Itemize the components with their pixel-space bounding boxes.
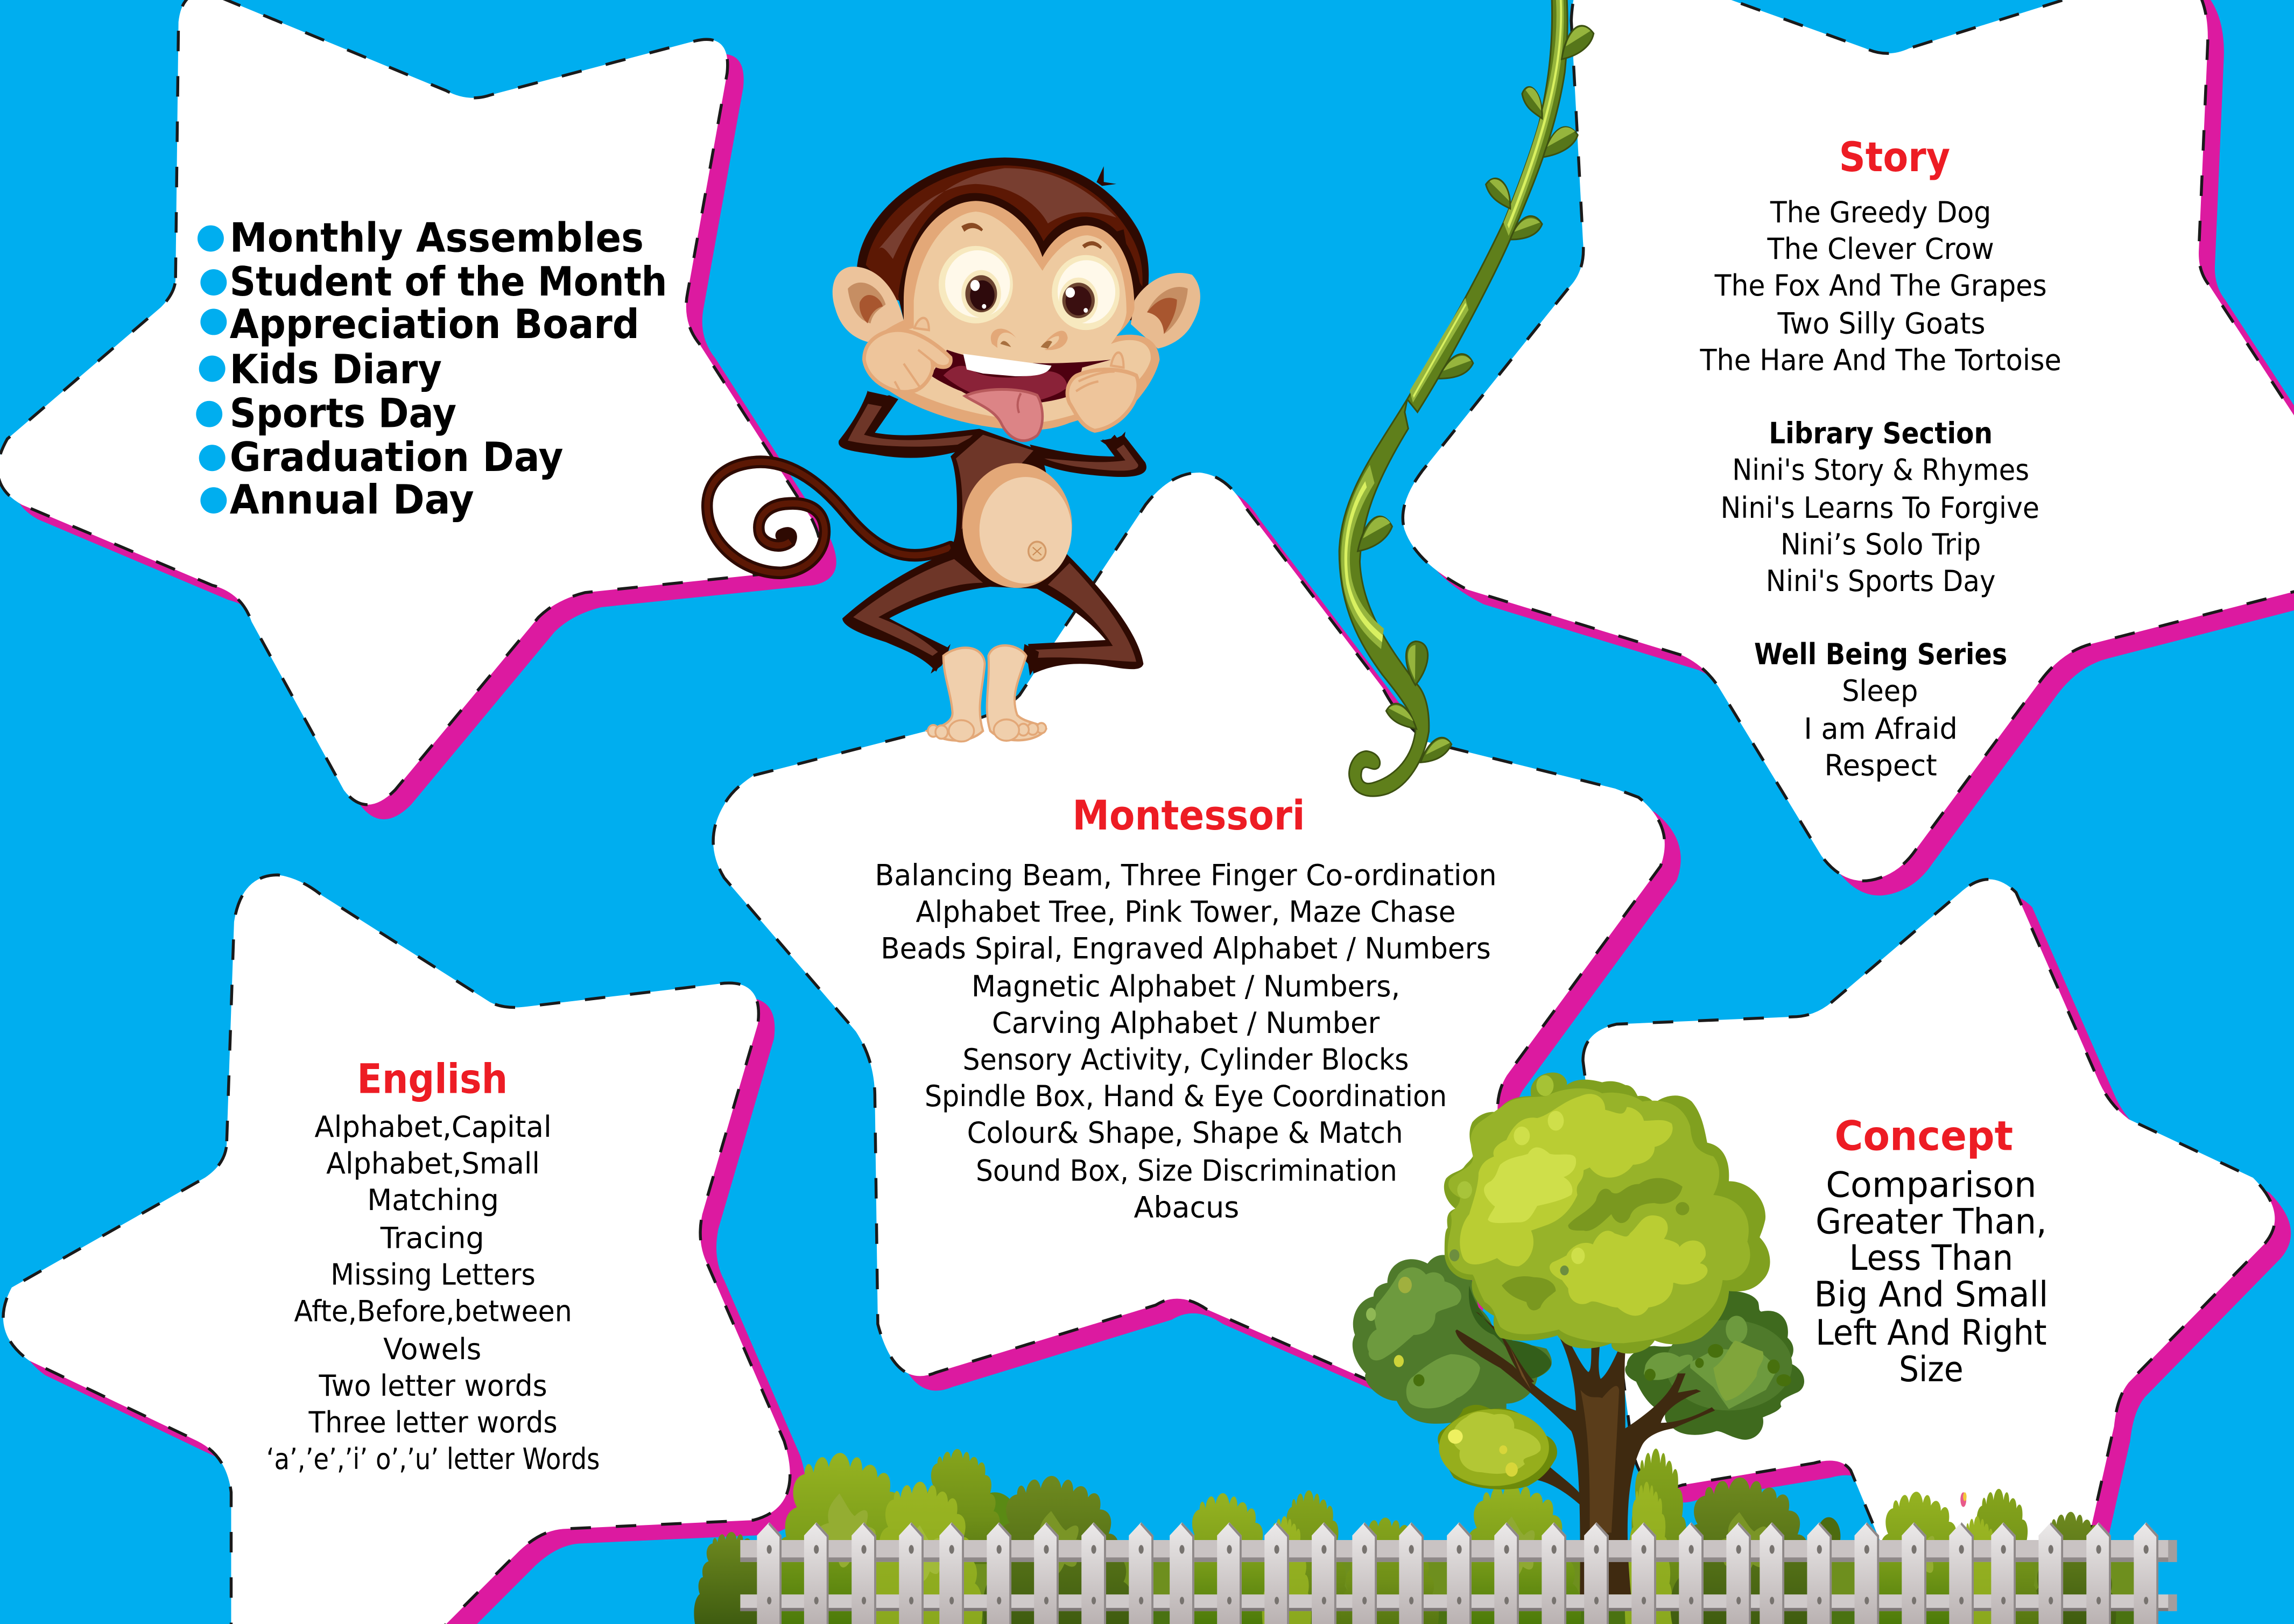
story list: Nini's Learns To Forgive bbox=[1720, 491, 2039, 525]
panel: concept star bbox=[1583, 880, 2291, 1624]
rails bbox=[740, 1540, 2177, 1611]
montessori list: Alphabet Tree, Pink Tower, Maze Chase bbox=[916, 895, 1456, 929]
story list: The Clever Crow bbox=[1767, 232, 1994, 266]
english list: ‘a’,’e’,’i’ o’,’u’ letter Words bbox=[266, 1442, 600, 1476]
english list: Matching bbox=[367, 1183, 499, 1217]
story list: Library Section bbox=[1769, 417, 1993, 451]
story list: The Hare And The Tortoise bbox=[1700, 343, 2061, 377]
small crown bbox=[1438, 1405, 1557, 1489]
montessori list: Abacus bbox=[1134, 1190, 1239, 1224]
montessori list: Magnetic Alphabet / Numbers, bbox=[972, 969, 1400, 1003]
bushes bbox=[694, 1449, 2136, 1624]
concept list: Less Than bbox=[1849, 1238, 2013, 1278]
story list: I am Afraid bbox=[1804, 712, 1958, 746]
icon: butterfly bbox=[1960, 1492, 1967, 1507]
montessori list: Sensory Activity, Cylinder Blocks bbox=[963, 1043, 1409, 1077]
concept list: Left And Right bbox=[1816, 1312, 2047, 1353]
heading: English: English bbox=[357, 1054, 508, 1102]
concept list: Big And Small bbox=[1814, 1274, 2048, 1315]
english list: Afte,Before,between bbox=[294, 1294, 572, 1328]
event list: Student of the Month bbox=[230, 258, 667, 305]
icon: vine bbox=[1339, 0, 1594, 796]
icon: tree bbox=[1353, 1073, 1804, 1594]
english list: Tracing bbox=[380, 1221, 484, 1255]
event list: Annual Day bbox=[230, 476, 474, 523]
story list: The Greedy Dog bbox=[1770, 195, 1991, 229]
concept list: Comparison bbox=[1826, 1164, 2037, 1205]
main crown bbox=[1444, 1073, 1770, 1354]
panel: montessori star bbox=[713, 473, 1681, 1408]
montessori list: Beads Spiral, Engraved Alphabet / Numbers bbox=[881, 931, 1491, 965]
concept list bbox=[1814, 1164, 2048, 1390]
english list: Alphabet,Capital bbox=[314, 1110, 552, 1144]
story list: Two Silly Goats bbox=[1777, 307, 1985, 341]
montessori list: Sound Box, Size Discrimination bbox=[976, 1154, 1397, 1187]
panel: story star bbox=[1403, 0, 2294, 896]
concept list: Size bbox=[1899, 1349, 1964, 1390]
monkey head bbox=[833, 158, 1200, 430]
montessori list: Spindle Box, Hand & Eye Coordination bbox=[925, 1079, 1447, 1113]
english list: Vowels bbox=[383, 1332, 481, 1366]
monkey feet bbox=[927, 645, 1046, 742]
event list: Monthly Assembles bbox=[230, 215, 644, 261]
story list: The Fox And The Grapes bbox=[1714, 269, 2047, 303]
left crown bbox=[1353, 1255, 1552, 1424]
concept list: Greater Than, bbox=[1816, 1201, 2047, 1242]
story list: Nini's Story & Rhymes bbox=[1732, 453, 2029, 487]
event list: Kids Diary bbox=[230, 346, 442, 393]
event list: Sports Day bbox=[230, 390, 456, 437]
icon: monkey bbox=[707, 158, 1200, 742]
montessori list: Colour& Shape, Shape & Match bbox=[967, 1116, 1403, 1150]
event list: Appreciation Board bbox=[230, 301, 639, 348]
monkey mouth bbox=[931, 350, 1111, 441]
panel: events star bbox=[0, 0, 836, 819]
right crown bbox=[1625, 1291, 1804, 1440]
english list: Missing Letters bbox=[330, 1257, 536, 1291]
story list: Nini's Sports Day bbox=[1766, 564, 1996, 598]
story list: Nini’s Solo Trip bbox=[1781, 528, 1981, 561]
story list: Respect bbox=[1824, 749, 1937, 783]
monkey tail bbox=[707, 462, 951, 573]
english list: Two letter words bbox=[319, 1369, 547, 1403]
trunk and branches bbox=[1455, 1312, 1715, 1594]
heading: Story: Story bbox=[1839, 133, 1950, 181]
pickets bbox=[757, 1522, 2158, 1624]
event list: Graduation Day bbox=[230, 434, 563, 481]
montessori list bbox=[875, 858, 1497, 1224]
story list: Sleep bbox=[1842, 674, 1918, 708]
english list bbox=[266, 1110, 600, 1476]
story list: Well Being Series bbox=[1754, 637, 2007, 671]
montessori list: Balancing Beam, Three Finger Co-ordination bbox=[875, 858, 1497, 892]
english list: Alphabet,Small bbox=[326, 1147, 540, 1180]
fence bbox=[740, 1522, 2177, 1624]
english list: Three letter words bbox=[308, 1405, 558, 1439]
story list bbox=[1700, 195, 2061, 783]
monkey hands bbox=[864, 318, 1138, 431]
monkey limbs and torso bbox=[839, 390, 1146, 676]
montessori list: Carving Alphabet / Number bbox=[992, 1006, 1380, 1040]
heading: Montessori: Montessori bbox=[1072, 791, 1305, 839]
monkey belly bbox=[962, 463, 1072, 588]
panel: english star bbox=[3, 875, 806, 1624]
event list bbox=[196, 215, 667, 523]
heading: Concept: Concept bbox=[1835, 1112, 2013, 1159]
